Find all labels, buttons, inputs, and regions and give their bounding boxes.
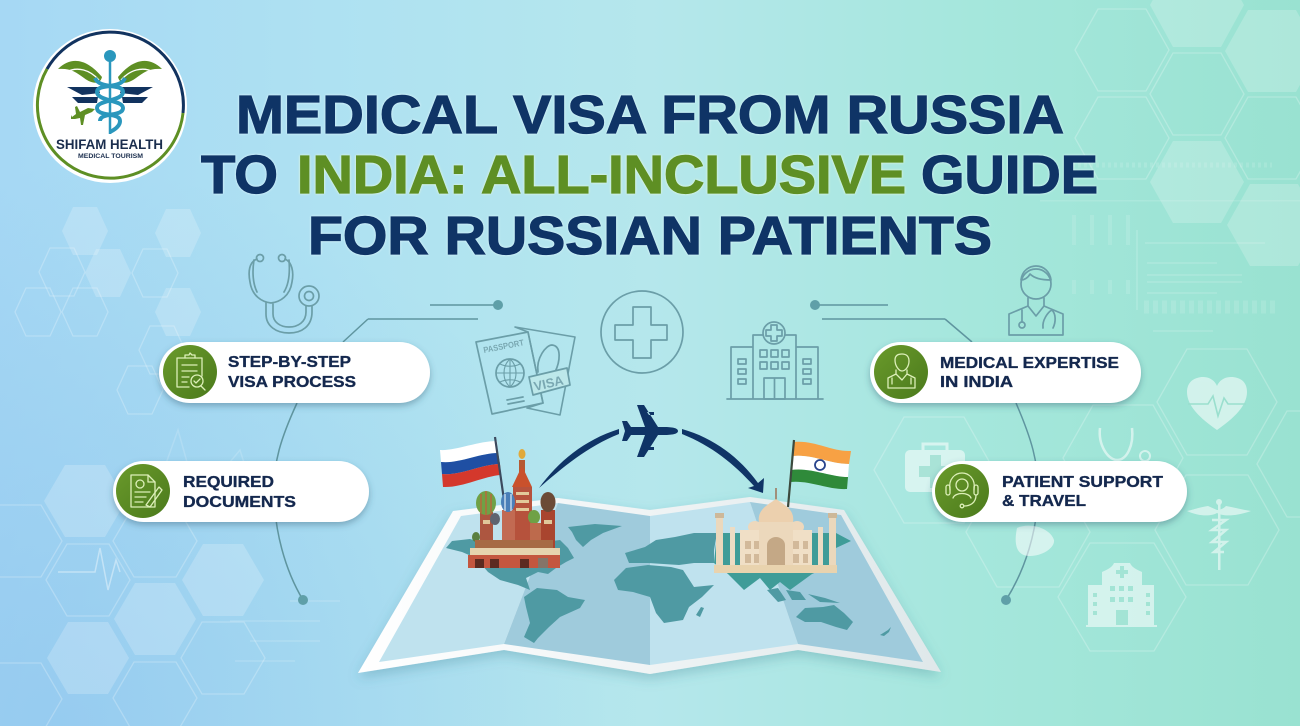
- South America: [524, 588, 585, 643]
- background hexagons: left: [0, 207, 265, 726]
- pill: required documents: DOCUMENTS: [183, 494, 296, 511]
- pill: medical expertise in India: IN INDIA: [940, 374, 1014, 391]
- pill: required documents: [113, 461, 369, 522]
- icon: passport and visa: [476, 327, 575, 415]
- pill: medical expertise in India: MEDICAL EXPERTISE: [940, 355, 1119, 372]
- pill: required documents: REQUIRED: [183, 474, 274, 491]
- icon: Indian flag: [788, 440, 851, 507]
- pill: medical expertise in India: [870, 342, 1141, 403]
- Australia: [796, 605, 853, 630]
- icon: passport and visa: PASSPORT: [482, 337, 525, 355]
- background data texture: [230, 165, 1300, 662]
- map: [358, 497, 941, 674]
- pill: step-by-step visa process: [159, 342, 430, 403]
- title: INDIA: ALL-INCLUSIVE: [297, 145, 906, 205]
- icon: passport and visa: VISA: [532, 372, 565, 394]
- Europe: [625, 533, 717, 565]
- New Zealand: [880, 627, 891, 636]
- icon: St Basil's Cathedral: [468, 449, 560, 568]
- icon: stethoscope: [249, 254, 319, 333]
- background hexagons: right: [874, 0, 1300, 651]
- icon: headset agent: [946, 473, 978, 508]
- icon: document and pen: [131, 475, 162, 507]
- Madagascar: [696, 607, 704, 617]
- Africa: [614, 565, 714, 623]
- logo: Shifam Health: [33, 29, 187, 183]
- title: GUIDE: [921, 145, 1098, 205]
- icon: Russian flag: [440, 437, 504, 500]
- pill: patient support and travel: & TRAVEL: [1002, 493, 1086, 510]
- Asia: [714, 533, 851, 590]
- pill: patient support and travel: PATIENT SUPPORT: [1002, 474, 1163, 491]
- logo caduceus: [95, 50, 125, 134]
- title: MEDICAL VISA FROM RUSSIA: [236, 85, 1064, 145]
- faint hexagon icons: [905, 377, 1251, 627]
- title: [201, 85, 1098, 266]
- title: FOR RUSSIAN PATIENTS: [308, 206, 992, 266]
- title: TO: [201, 145, 278, 205]
- icon: clipboard check: [177, 353, 205, 390]
- logo plane: [71, 106, 95, 125]
- icon: airplane: [622, 405, 678, 457]
- North America: [446, 539, 574, 590]
- pill: step-by-step visa process: VISA PROCESS: [228, 374, 356, 391]
- Greenland: [568, 524, 622, 547]
- icon: doctor: [1009, 266, 1063, 335]
- icon: doctor in circle: [888, 354, 915, 388]
- logo: Shifam Health: SHIFAM HEALTH: [56, 137, 163, 152]
- logo: Shifam Health: MEDICAL TOURISM: [78, 153, 143, 160]
- flight path arc right with arrow: [682, 429, 764, 493]
- Southeast Asia and Indonesia: [767, 588, 840, 603]
- decorative connector lines: [274, 300, 1038, 605]
- pill: step-by-step visa process: STEP-BY-STEP: [228, 354, 351, 371]
- map continents: [446, 524, 891, 643]
- icon: medical cross: [601, 291, 683, 373]
- logo wings: [58, 61, 162, 103]
- icon: Taj Mahal: [714, 488, 837, 573]
- flight path arc left: [539, 429, 619, 488]
- heart pulse and medkit cross marks: [919, 396, 1246, 488]
- pill: patient support and travel: [932, 461, 1187, 522]
- icon: hospital: [727, 322, 823, 399]
